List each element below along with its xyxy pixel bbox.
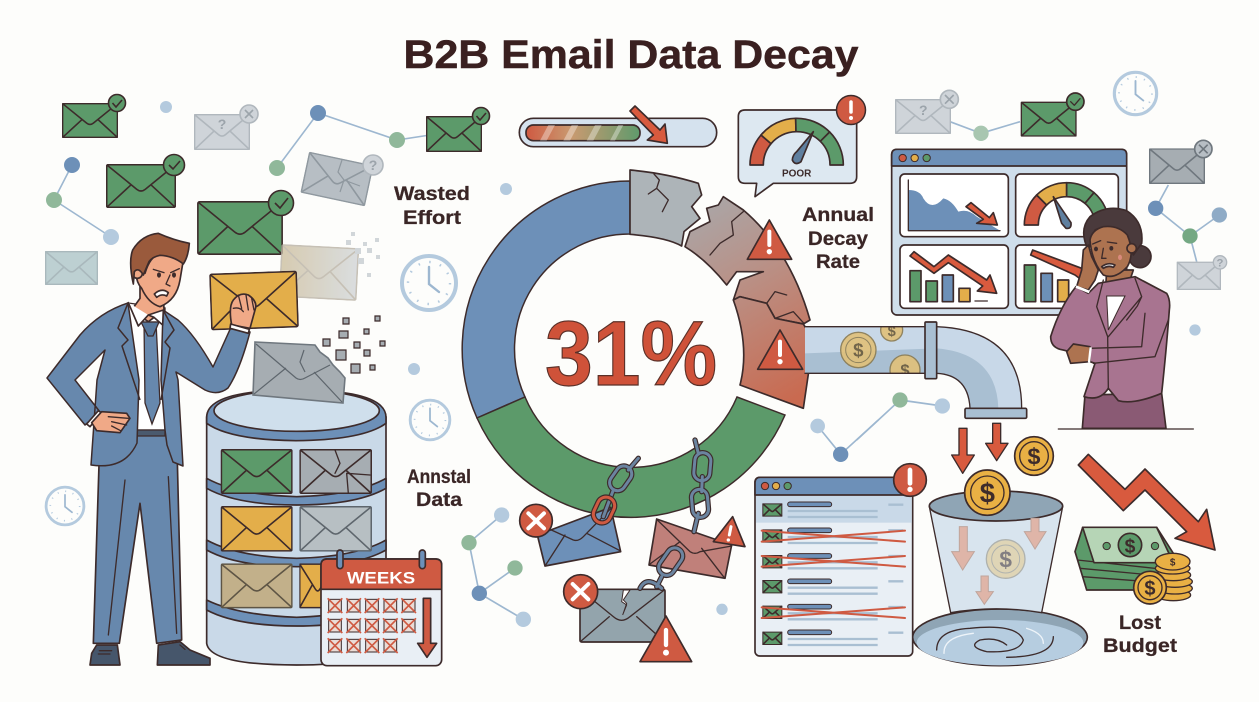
pipe leaking coins [805,319,1027,440]
coin: right of arrows [1015,437,1053,475]
chart: small gauge [1024,183,1109,228]
envelope: green top centre [427,108,490,151]
woman: neck and shirt [1105,270,1133,300]
man: head [128,233,189,326]
woman: bun and hair [1129,246,1151,268]
woman: lower hand [1067,344,1090,363]
pipe: coins inside: $ [900,361,910,380]
pipe: small network below [857,392,950,440]
clock: mid left [410,400,450,440]
money stack [1075,527,1173,590]
badge: blue envelope x [520,504,552,537]
man: fist [230,294,256,333]
coin: top of funnel [965,470,1010,515]
alert badge on gauge [836,96,866,124]
envelope: pale with question [1177,256,1227,290]
envelope: yellow held in fist [210,271,298,330]
badge: grey envelope x [564,575,598,609]
coin stack [1134,553,1192,604]
envelope: grey cracked with x [1150,140,1212,183]
database shelf bands [207,478,386,626]
donut chart [462,170,813,517]
money stack: $ [1125,537,1136,558]
chain: second [691,440,712,532]
donut: blue segment [462,181,630,418]
label: annstal data: Data [416,490,462,511]
clock: top right [1114,72,1157,115]
envelope: broken grey with pixels [253,316,385,403]
funnel pale arrows [952,518,1046,604]
chart: falling area [908,180,1000,231]
envelope: faded tan dissolving [279,232,380,300]
title: B2B Email Data Decay [404,33,859,77]
clock: upper left [402,256,456,310]
red strike-outs [762,531,905,618]
network nodes: left [46,101,512,375]
label: annual decay rate: Rate [816,252,860,273]
man: cuffs and hip hand [87,411,130,433]
dashboard window [892,149,1127,315]
envelope: mauve chained [649,519,732,578]
donut: big percentage: 31% [545,303,717,405]
label: annstal data: Annstal [407,467,471,488]
woman: hand on cheek [1077,245,1098,290]
coin: top of funnel: $ [980,478,995,509]
envelope: grey tilted question [301,152,383,206]
coin stack: $ [1170,557,1176,568]
calendar: crossed-off days [328,598,416,653]
envelope: grey tilted question: ? [369,157,377,173]
alert badge [894,464,926,496]
envelope: pale with question: ? [1217,258,1224,270]
falling red zigzag arrow [1078,454,1215,550]
envelope: green with check [1021,93,1084,136]
email list window [755,464,926,656]
progress bar with falling arrow [519,106,717,147]
donut: warning triangle upper [747,220,792,259]
pipe: coins inside [840,327,921,373]
envelope: grey question with x: ? [919,102,928,118]
calendar: down arrow [418,598,437,657]
database cylinder [207,390,386,665]
envelope: green small with check [63,94,126,137]
man: legs and shoes [90,433,210,665]
right network and envelopes [896,90,1227,336]
coin stack: $ [1144,578,1156,600]
funnel rim [929,491,1063,521]
pipe: coins inside: $ [853,340,864,361]
funnel body [929,507,1063,613]
label: lost budget: Lost [1119,613,1162,634]
label: wasted effort: Effort [403,208,462,229]
envelope: pale teal [46,252,97,284]
label: annual decay rate: Annual [802,205,874,226]
envelope: green medium with check [107,154,184,207]
chain: third [640,545,686,588]
coin: faded in funnel [986,540,1025,578]
label: wasted effort: Wasted [394,184,470,205]
funnel base swirl [913,609,1087,666]
chain: first [591,458,638,526]
bottom-right group [755,419,1215,666]
badge: mauve envelope warning [713,517,745,547]
envelope: grey broken chained [580,589,665,642]
clock: far left [46,487,84,525]
label: lost budget: Budget [1103,636,1178,657]
donut: green segment [477,397,785,517]
gauge speech bubble [738,110,857,197]
pipe: coins inside: $ [888,324,896,340]
woman: jacket [1051,277,1170,402]
woman: skirt [1082,393,1166,428]
calendar: weeks [321,550,442,666]
envelope: grey question: ? [218,116,226,132]
donut: decayed cracked segments [630,170,813,408]
woman: worried professional [1051,208,1193,429]
envelope: grey question [195,105,258,149]
network nodes [461,507,728,627]
woman: face [1090,226,1131,276]
chart: bars with falling arrow [1024,250,1082,302]
bottom-centre group: chained envelopes [461,440,745,662]
envelope: grey question with x [896,90,958,133]
man: shirt and tie [128,303,165,436]
coin: right of arrows: $ [1028,444,1041,470]
arrows falling from pipe [952,423,1008,473]
coin: faded in funnel: $ [999,546,1012,572]
man: frustrated businessman [47,233,250,665]
label: annual decay rate: Decay [808,229,868,250]
man: jacket [47,303,250,466]
donut: warning triangle lower [758,330,803,369]
calendar: heading: WEEKS [347,568,415,587]
gauge speech bubble: POOR [782,168,811,179]
envelope: green large with check [198,190,294,254]
list rows [763,504,782,645]
envelope: blue chained [537,507,621,566]
chart: bars with zigzag arrow [910,252,997,302]
badge: grey envelope warning [640,616,692,662]
database stored envelopes [221,450,371,608]
network nodes [810,419,878,462]
